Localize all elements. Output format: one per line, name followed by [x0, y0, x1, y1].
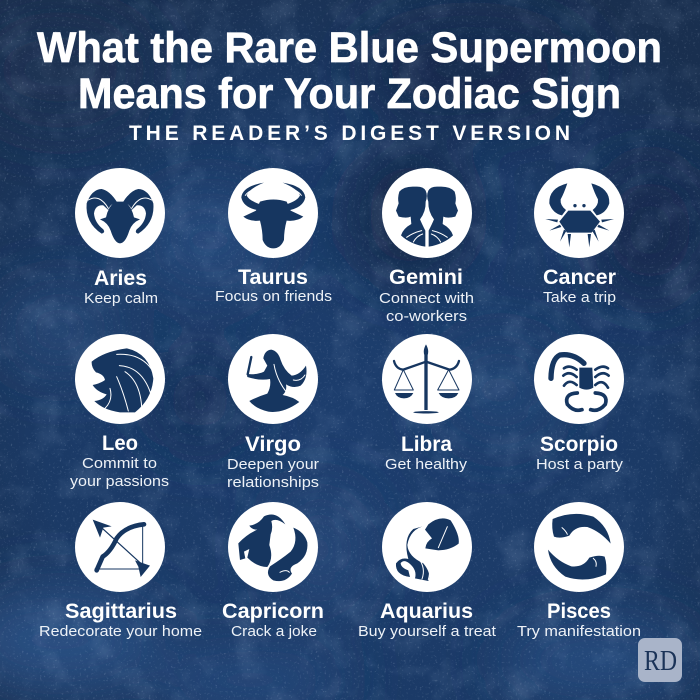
title	[37, 24, 662, 118]
advice: Crack a joke	[231, 623, 317, 640]
name: Scorpio	[540, 433, 618, 456]
advice: Deepen your	[227, 456, 319, 473]
name: Pisces	[547, 600, 611, 623]
logo: RD: RD	[644, 645, 677, 677]
name: Aries	[94, 267, 147, 290]
advice: Keep calm	[84, 290, 158, 307]
icon: bow and arrow	[75, 502, 165, 592]
advice: Redecorate your home	[39, 623, 202, 640]
name: Libra	[401, 433, 452, 456]
icon: lion	[75, 334, 165, 424]
panel: Cancer	[534, 168, 624, 306]
name: Capricorn	[222, 600, 324, 623]
advice: Take a trip	[543, 289, 616, 306]
panel: Libra	[382, 334, 472, 473]
panel: Aries	[75, 168, 165, 307]
icon: two fish	[534, 502, 624, 592]
advice: Buy yourself a treat	[358, 623, 497, 640]
panel: Virgo	[227, 334, 319, 491]
icon: bull	[228, 168, 318, 258]
icon: scorpion	[534, 334, 624, 424]
advice: co-workers	[386, 308, 467, 325]
panel: Scorpio	[534, 334, 624, 473]
panel: Aquarius	[358, 502, 497, 640]
advice: Try manifestation	[517, 623, 641, 640]
panel: Sagittarius	[39, 502, 202, 640]
subtitle: THE READER’S DIGEST VERSION	[129, 122, 570, 145]
icon: ram	[75, 168, 165, 258]
icon: water bearer	[382, 502, 472, 592]
advice: Commit to	[82, 455, 157, 472]
panel: Leo	[70, 334, 169, 490]
name: Virgo	[245, 433, 301, 456]
icon: sea goat	[228, 502, 318, 592]
name: Sagittarius	[65, 600, 177, 623]
name: Taurus	[238, 266, 308, 289]
panel: Capricorn	[222, 502, 324, 640]
advice: Focus on friends	[215, 288, 332, 305]
logo: RD	[638, 638, 682, 682]
title: What the Rare Blue Supermoon	[37, 24, 662, 72]
name: Leo	[102, 432, 138, 455]
advice: your passions	[70, 473, 169, 490]
advice: relationships	[227, 474, 319, 491]
advice: Connect with	[379, 290, 474, 307]
panel: Pisces	[517, 502, 641, 640]
advice: Host a party	[536, 456, 624, 473]
panel: Taurus	[215, 168, 332, 305]
icon: maiden	[228, 334, 318, 424]
panel: Gemini	[379, 168, 474, 325]
icon: scales	[382, 334, 472, 424]
title: Means for Your Zodiac Sign	[78, 70, 621, 118]
icon: twins	[382, 168, 472, 258]
icon: crab	[534, 168, 624, 258]
name: Cancer	[543, 266, 616, 289]
name: Aquarius	[380, 600, 473, 623]
advice: Get healthy	[385, 456, 468, 473]
name: Gemini	[389, 266, 463, 289]
